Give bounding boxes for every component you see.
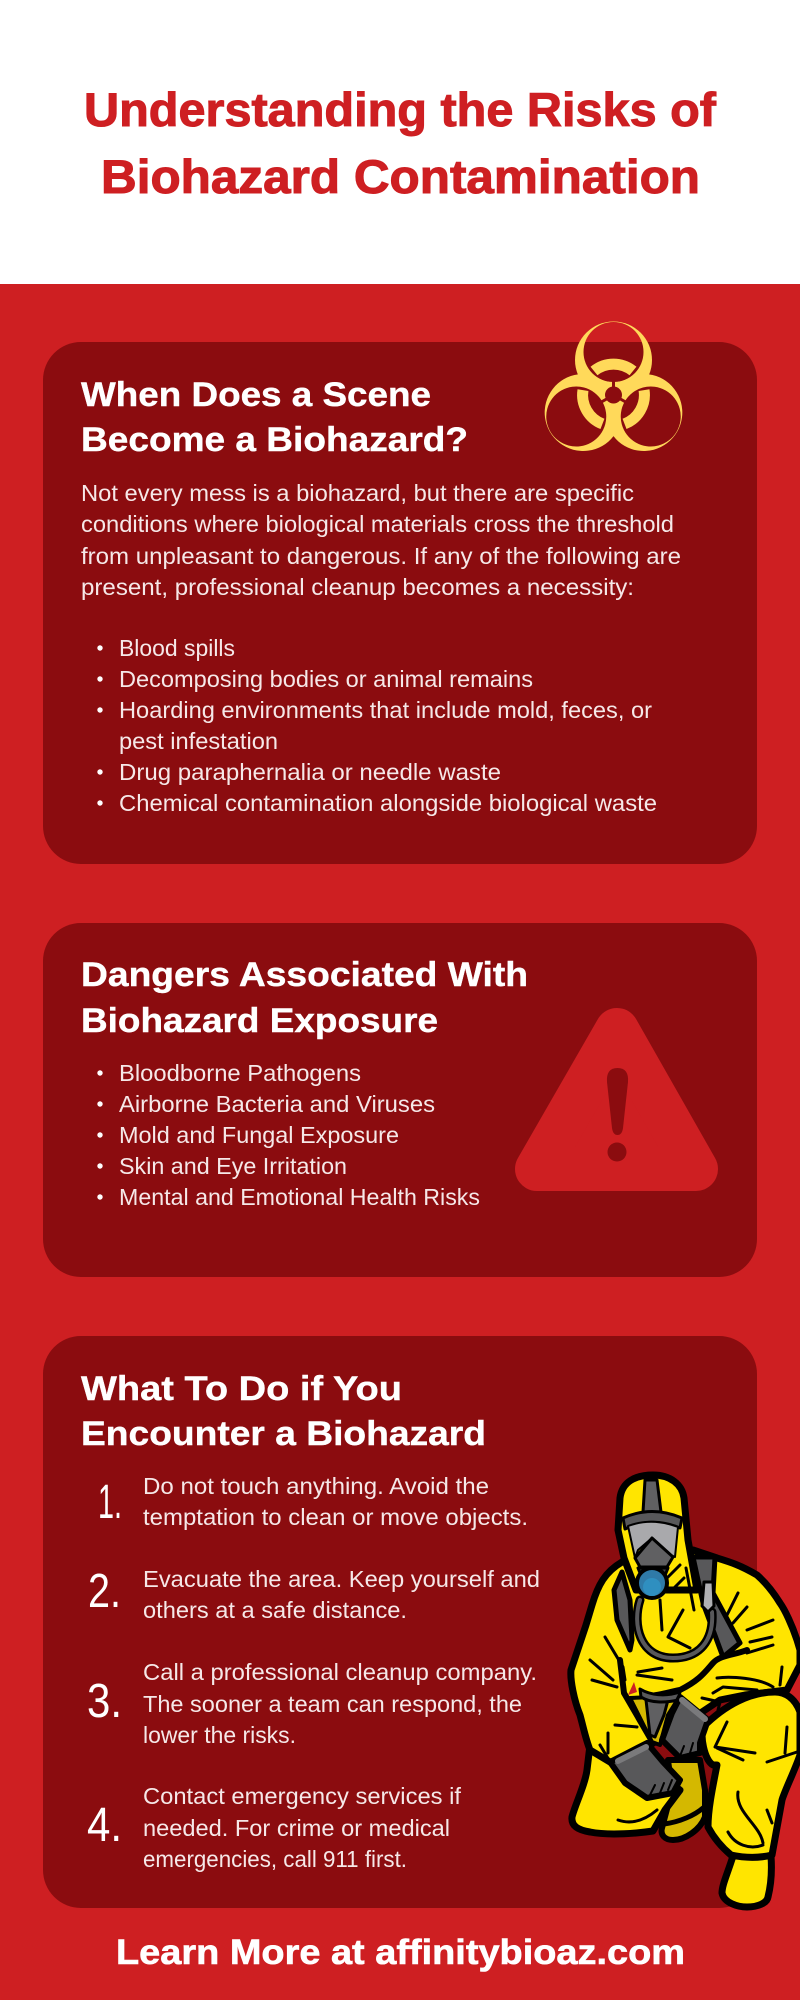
step 4 <box>87 1783 462 1872</box>
respirator <box>637 1568 667 1598</box>
intro paragraph: from unpleasant to dangerous. If any of the following are <box>81 543 681 569</box>
panel: dangers <box>43 923 757 1277</box>
icon: warning triangle <box>537 1030 696 1169</box>
right leg and knee <box>702 1692 800 1857</box>
hood folds <box>665 1565 694 1610</box>
step 4: 4. <box>87 1799 122 1852</box>
far boot <box>662 1760 705 1840</box>
intro paragraph: present, professional cleanup becomes a necessity: <box>81 574 634 600</box>
intro paragraph <box>81 480 681 600</box>
heading: what to do: What To Do if You <box>81 1370 402 1408</box>
step 3: 3. <box>87 1675 122 1728</box>
bullet list: biohazard conditions: Decomposing bodies or animal remains <box>119 666 533 692</box>
heading: what to do <box>81 1370 486 1453</box>
heading: when does a scene: When Does a Scene <box>81 376 431 414</box>
heading: what to do: Encounter a Biohazard <box>81 1415 486 1453</box>
hood <box>618 1475 697 1590</box>
heading: dangers: Dangers Associated With <box>81 956 528 994</box>
bullet list: biohazard conditions: pest infestation <box>119 728 278 754</box>
heading: dangers: Biohazard Exposure <box>81 1002 438 1040</box>
step 4: emergencies, call 911 first. <box>143 1846 407 1872</box>
forearm outline <box>650 1650 747 1696</box>
foot <box>722 1856 771 1907</box>
step 4: Contact emergency services if <box>143 1783 462 1809</box>
step 1 <box>98 1473 528 1530</box>
step 2: Evacuate the area. Keep yourself and <box>143 1566 540 1592</box>
bullet list: dangers <box>97 1060 480 1210</box>
gloves <box>610 1697 708 1798</box>
waist strap and belt <box>628 1682 680 1745</box>
left thigh <box>572 1745 680 1834</box>
bullet list: biohazard conditions: Drug paraphernalia or needle waste <box>119 759 501 785</box>
icon: hazmat suit worker <box>571 1475 800 1907</box>
air canister <box>702 1582 714 1612</box>
bullet list: dangers: Mental and Emotional Health Risks <box>119 1184 480 1210</box>
bullet list: biohazard conditions: Chemical contamination alongside biological waste <box>119 790 657 816</box>
panel: when does a scene become a biohazard <box>43 318 757 864</box>
panel: what to do <box>43 1336 757 1908</box>
title: Understanding the Risks of <box>84 83 716 136</box>
bullet list: dangers: Skin and Eye Irritation <box>119 1153 347 1179</box>
title <box>84 83 716 203</box>
footer call to action: Learn More at affinitybioaz.com <box>116 1933 685 1972</box>
step 2 <box>88 1565 540 1623</box>
bullet list: biohazard conditions: Blood spills <box>119 635 235 661</box>
icon: biohazard symbol <box>540 318 686 454</box>
bullet list: dangers: Bloodborne Pathogens <box>119 1060 361 1086</box>
intro paragraph: Not every mess is a biohazard, but there are specific <box>81 480 634 506</box>
step 2: 2. <box>88 1565 121 1618</box>
bullet list: biohazard conditions <box>97 635 657 816</box>
step 3 <box>87 1659 537 1748</box>
title: Biohazard Contamination <box>101 150 700 203</box>
bullet list: biohazard conditions: Hoarding environments that include mold, feces, or <box>119 697 652 723</box>
step 1: temptation to clean or move objects. <box>143 1504 528 1530</box>
step 3: The sooner a team can respond, the <box>143 1691 522 1717</box>
intro paragraph: conditions where biological materials cross the threshold <box>81 511 674 537</box>
step 1: 1. <box>98 1476 122 1529</box>
helmet stripe and visor <box>623 1480 682 1578</box>
torso and arms <box>571 1550 800 1768</box>
bullet list: dangers: Airborne Bacteria and Viruses <box>119 1091 435 1117</box>
step 2: others at a safe distance. <box>143 1597 407 1623</box>
step 1: Do not touch anything. Avoid the <box>143 1473 489 1499</box>
heading: when does a scene: Become a Biohazard? <box>81 421 468 459</box>
step 4: needed. For crime or medical <box>143 1815 450 1841</box>
step 3: Call a professional cleanup company. <box>143 1659 537 1685</box>
heading: when does a scene <box>81 376 468 459</box>
air hose <box>637 1600 712 1658</box>
suit folds <box>590 1593 782 1770</box>
step 3: lower the risks. <box>143 1722 296 1748</box>
heading: dangers <box>81 956 528 1040</box>
bullet list: dangers: Mold and Fungal Exposure <box>119 1122 399 1148</box>
backpack straps <box>614 1557 740 1657</box>
